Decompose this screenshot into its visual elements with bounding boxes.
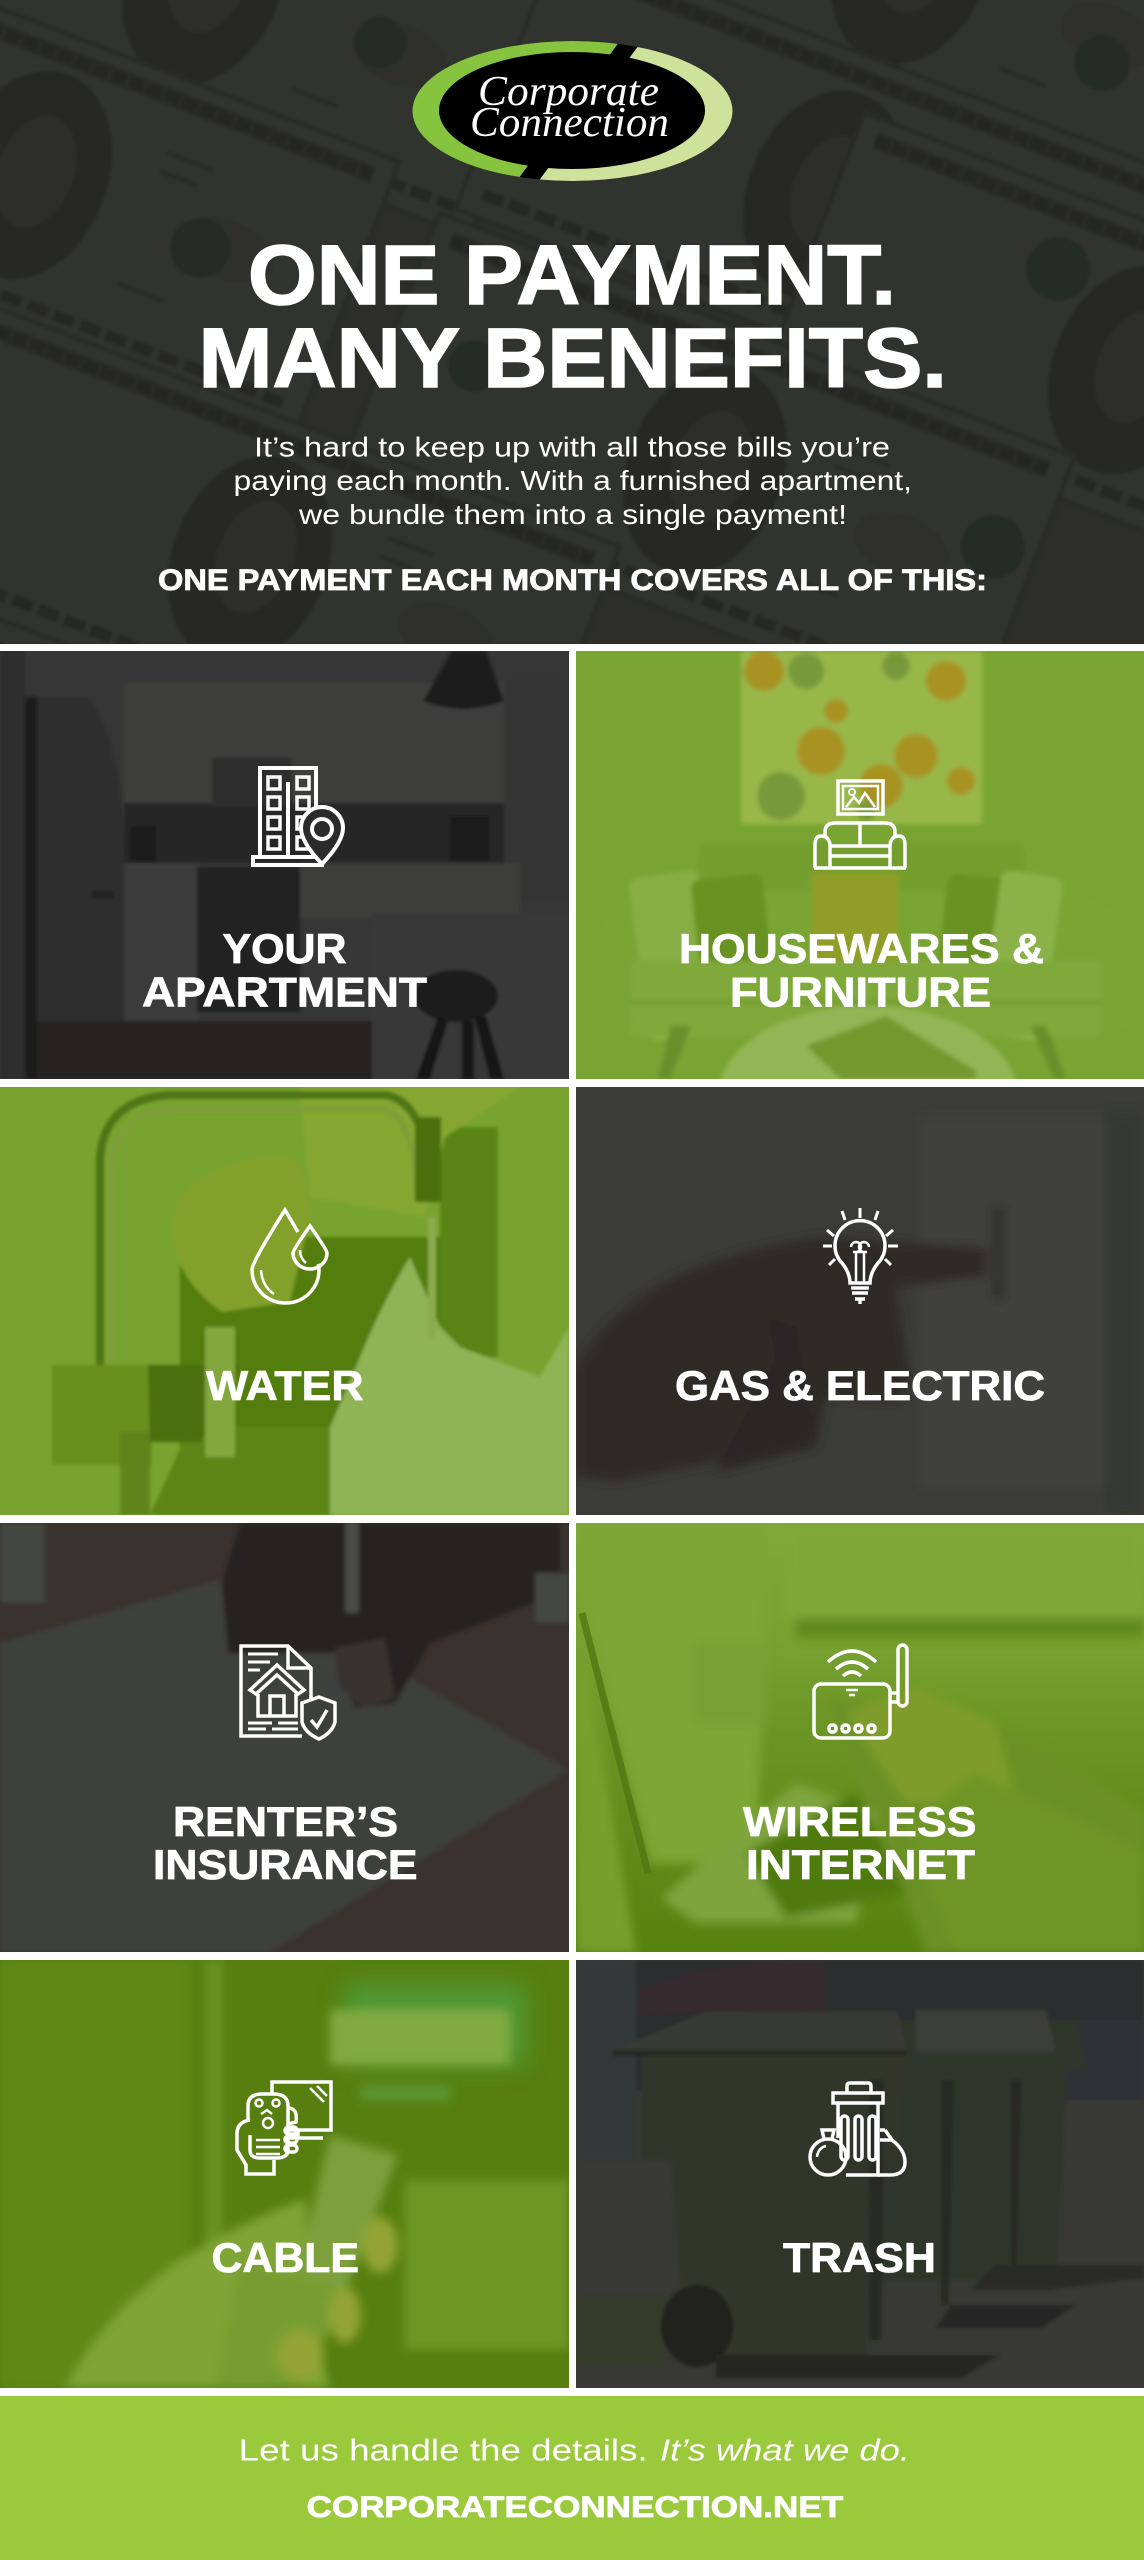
label: your apartment: YOUR	[222, 925, 346, 972]
label: your apartment: APARTMENT	[142, 968, 427, 1016]
icon: hand holding remote with tv	[237, 2082, 331, 2174]
label: wireless internet: INTERNET	[746, 1841, 975, 1888]
icon: house document with shield	[241, 1646, 335, 1739]
icon: wireless router	[814, 1645, 907, 1738]
panel: header with banknote photo	[0, 0, 1144, 817]
icon: light bulb	[823, 1208, 898, 1304]
footer tagline: It’s what we do.	[660, 2432, 910, 2468]
intro paragraph: paying each month. With a furnished apartment,	[234, 465, 912, 496]
footer tagline: Let us handle the details.	[239, 2432, 648, 2468]
intro paragraph	[234, 432, 912, 530]
label: renter's insurance: RENTER’S	[173, 1798, 398, 1845]
logo: Corporate Connection: Connection	[470, 100, 669, 146]
logo: Corporate Connection: Corporate	[478, 69, 659, 115]
panel: water	[0, 1087, 569, 1515]
title	[198, 228, 947, 405]
panel: wireless internet	[576, 1523, 1144, 1952]
label: wireless internet: WIRELESS	[743, 1798, 976, 1845]
title: MANY BENEFITS.	[198, 311, 947, 405]
label: cable: CABLE	[212, 2234, 359, 2281]
label: housewares and furniture: FURNITURE	[730, 968, 991, 1016]
panel: trash	[576, 1960, 1144, 2388]
panel: housewares and furniture	[576, 651, 1144, 1186]
icon: trash can with bags	[810, 2083, 905, 2175]
icon: apartment building with map pin	[253, 768, 343, 865]
panel: footer band	[0, 2396, 1144, 2560]
intro paragraph: we bundle them into a single payment!	[298, 499, 847, 530]
footer website: CORPORATECONNECTION.NET	[307, 2491, 843, 2524]
label: housewares and furniture	[679, 925, 1044, 1016]
icon: sofa with framed picture	[814, 781, 906, 868]
label: renter's insurance: INSURANCE	[153, 1841, 418, 1888]
subheading: ONE PAYMENT EACH MONTH COVERS ALL OF THIS:	[158, 564, 987, 597]
panel: gas and electric	[576, 1087, 1144, 1515]
label: renter's insurance	[153, 1798, 418, 1888]
icon: water drops	[252, 1210, 327, 1303]
label: wireless internet	[743, 1798, 976, 1888]
panel: your apartment	[0, 651, 569, 1079]
panel: renter's insurance	[0, 1523, 569, 1952]
title: ONE PAYMENT.	[248, 228, 896, 322]
label: housewares and furniture: HOUSEWARES &	[679, 925, 1044, 972]
label: trash: TRASH	[783, 2234, 936, 2281]
panel: cable	[0, 1960, 569, 2388]
footer tagline	[239, 2432, 910, 2468]
label: gas and electric: GAS & ELECTRIC	[675, 1362, 1045, 1409]
intro paragraph: It’s hard to keep up with all those bills you’re	[254, 432, 890, 462]
label: your apartment	[142, 925, 427, 1016]
logo: Corporate Connection	[412, 41, 732, 181]
label: water: WATER	[206, 1362, 364, 1409]
